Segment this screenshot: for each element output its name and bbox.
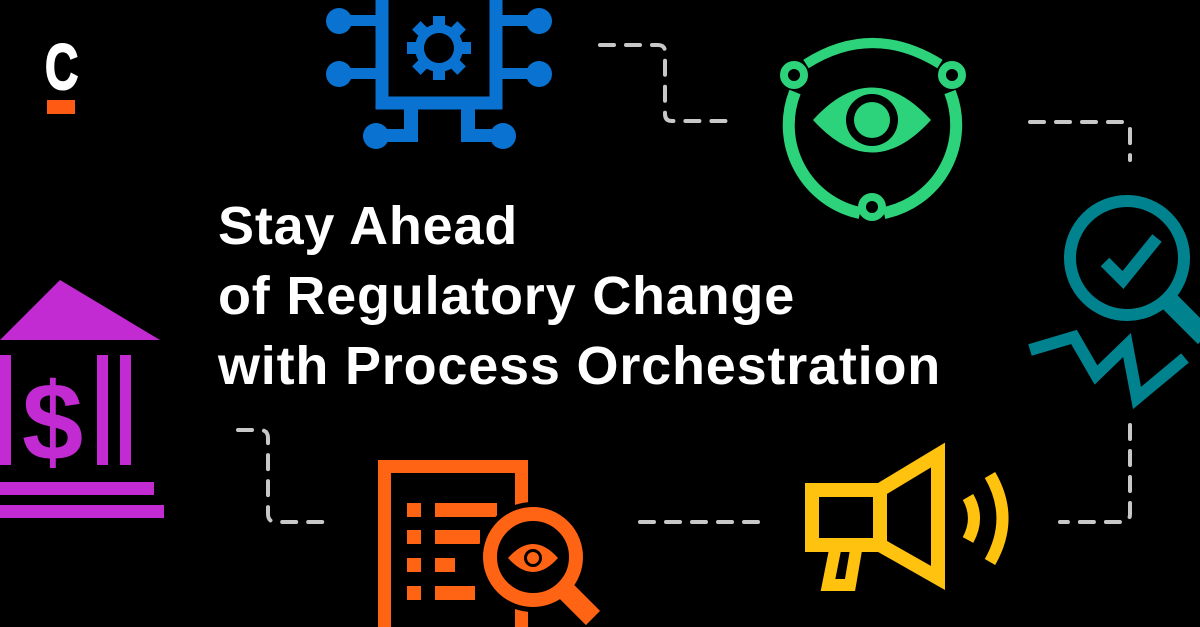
icon: bank [0, 280, 164, 518]
title [218, 196, 941, 396]
title: of Regulatory Change [218, 266, 795, 326]
icon: bank: $ [22, 361, 83, 484]
icon: megaphone [812, 455, 1002, 585]
icon: chip [326, 0, 552, 149]
logo: C [45, 32, 78, 103]
dashed connectors [238, 45, 1130, 522]
icon: teal magnifier check [1030, 201, 1200, 398]
icon: document magnifier [378, 460, 593, 627]
icon: eye orbit [784, 43, 962, 217]
title: Stay Ahead [218, 196, 518, 256]
title: with Process Orchestration [218, 336, 941, 396]
